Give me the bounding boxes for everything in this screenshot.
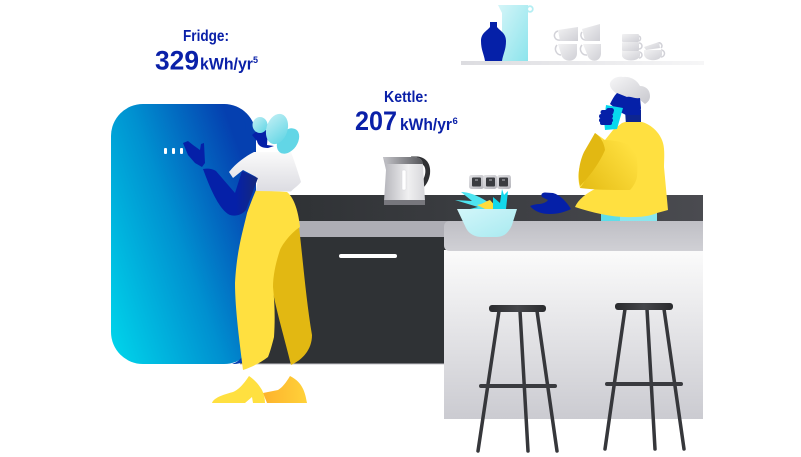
heading: kettle energy use [355, 89, 458, 136]
heading: kettle energy use: 6 [452, 116, 458, 127]
forearm shading [580, 140, 637, 190]
chef hair [610, 77, 650, 104]
kitchen back counter [240, 195, 703, 364]
vase [481, 22, 506, 61]
heading: fridge energy use: 329 [155, 46, 199, 76]
shirt [229, 152, 301, 192]
resting hand [530, 192, 571, 214]
heading: kettle energy use: 207 [355, 106, 397, 136]
dishwasher handle [339, 254, 397, 258]
woman at fridge [183, 111, 312, 403]
torso [575, 122, 668, 217]
glass [604, 105, 623, 130]
back leg [272, 218, 312, 365]
arm [203, 169, 258, 216]
heading: kettle energy use: Kettle: [384, 89, 428, 106]
jug [498, 5, 533, 61]
stool left [478, 305, 557, 451]
stacked cups [554, 24, 664, 61]
heading: fridge energy use: kWh/yr [200, 56, 254, 74]
front leg [235, 190, 300, 370]
trousers [601, 212, 657, 221]
neck [625, 110, 641, 127]
fridge [111, 104, 256, 364]
man drinking [530, 77, 668, 221]
kitchen island [444, 221, 703, 419]
shoes [212, 376, 307, 403]
heading: fridge energy use: 5 [253, 55, 258, 65]
fridge handle dots [164, 148, 183, 154]
bowl of salad [455, 189, 517, 237]
shelf board [461, 61, 704, 65]
hand holding glass [599, 108, 614, 125]
heading: fridge energy use: Fridge: [183, 28, 229, 45]
wall sockets [469, 175, 511, 189]
hair [252, 111, 304, 158]
head [610, 93, 641, 115]
heading: kettle energy use: kWh/yr [400, 116, 453, 134]
face [252, 130, 274, 148]
stool right [605, 303, 684, 449]
shelf with crockery [461, 5, 704, 65]
heading: fridge energy use [155, 28, 258, 76]
sleeve [579, 133, 605, 186]
hand [183, 141, 205, 167]
kettle [383, 156, 430, 205]
